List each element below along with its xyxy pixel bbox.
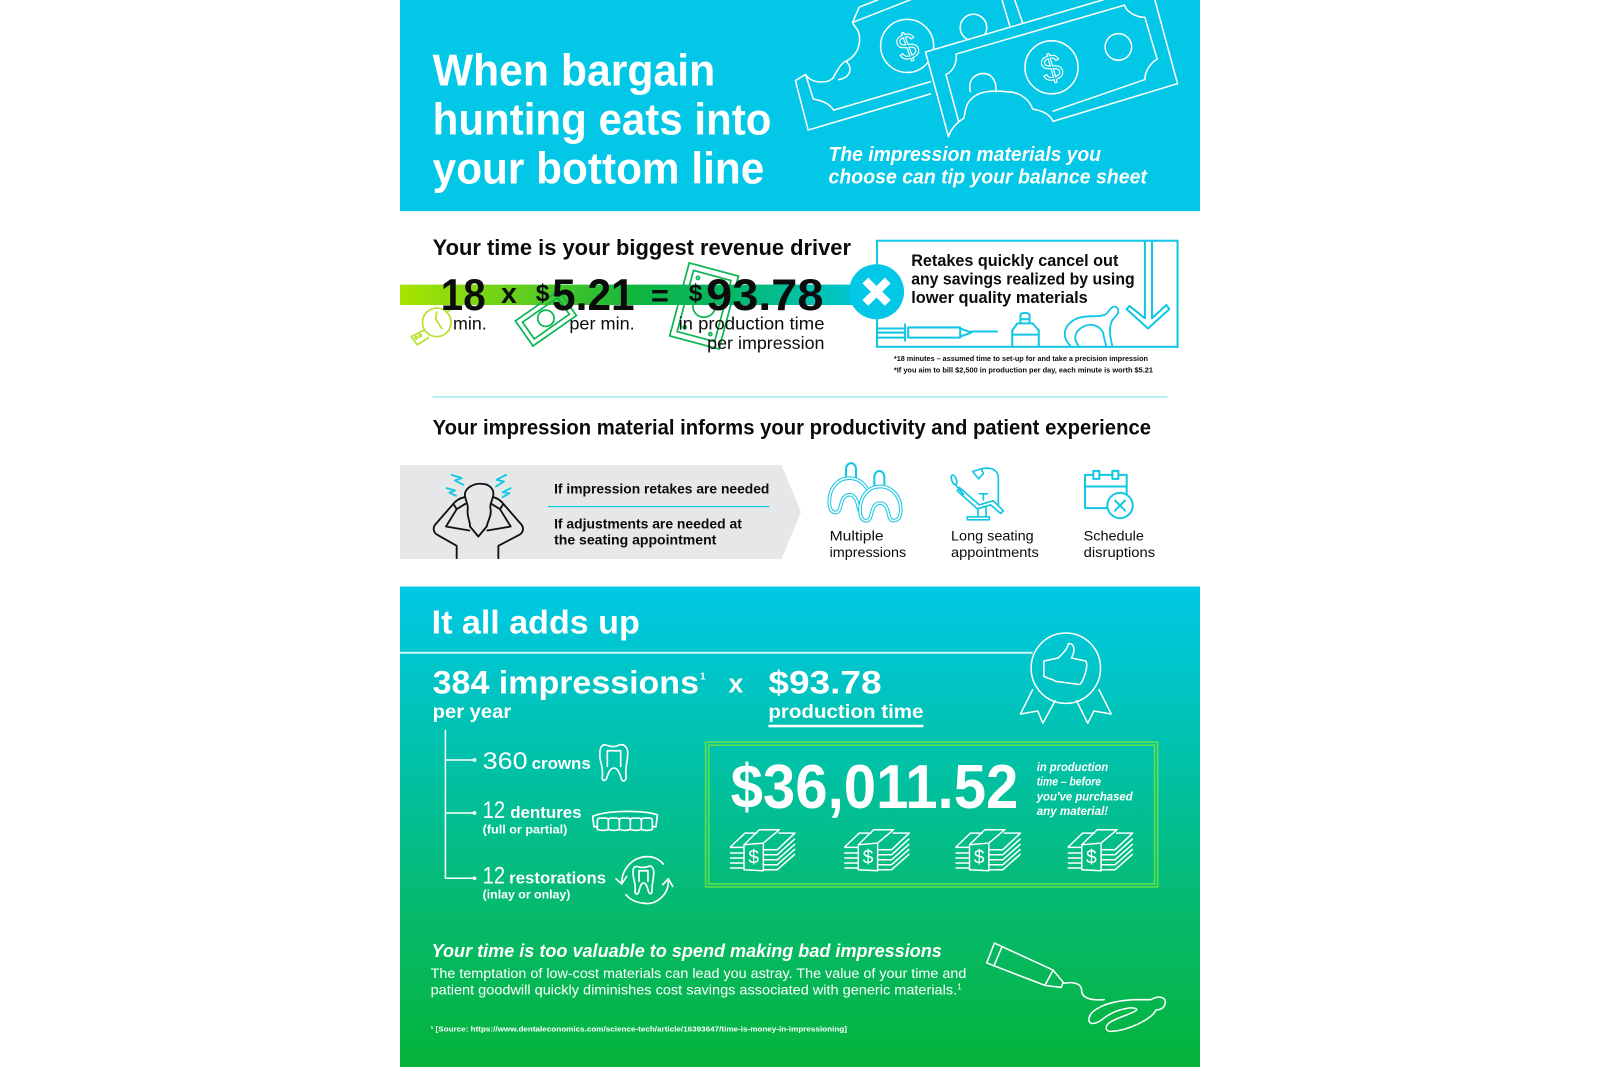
item: restorations: 12 — [483, 862, 505, 889]
equation: 18 — [441, 269, 486, 320]
equation: $ — [536, 280, 550, 307]
icon: syringe — [878, 324, 997, 341]
label: appointments — [951, 545, 1039, 561]
closing text: 1 — [957, 982, 962, 991]
item: crowns: crowns — [532, 755, 591, 773]
title — [433, 45, 771, 194]
arrow text: If impression retakes are needed — [554, 482, 769, 497]
icon: bitten dollar bills: $ — [891, 24, 924, 69]
icon: bitten dollar bills: $ — [1036, 45, 1067, 90]
icon: tube and tray — [987, 943, 1165, 1031]
equation labels: per impression — [707, 333, 824, 353]
total note — [1036, 760, 1133, 818]
multiply sign: x — [729, 669, 744, 699]
item: schedule disruptions — [1084, 471, 1155, 561]
total note: any material! — [1037, 804, 1108, 818]
panel: it all adds up — [400, 587, 1200, 1067]
equation: 93.78 — [706, 269, 823, 320]
label — [951, 529, 1039, 561]
callout text: lower quality materials — [911, 288, 1088, 307]
equation: $ — [689, 280, 703, 307]
stat: production time — [768, 664, 924, 727]
equation labels: per min. — [569, 313, 635, 333]
icon: down arrow — [1127, 241, 1169, 328]
footnotes: *18 minutes – assumed time to set-up for and take a precision impression — [894, 354, 1148, 363]
icon: impression tray — [1065, 307, 1118, 346]
footnotes — [894, 354, 1154, 374]
icon: thumbs-up badge — [1020, 633, 1111, 723]
equation labels: min. — [453, 313, 487, 333]
icon: cash stack 4 — [1068, 830, 1133, 871]
label: impressions — [830, 545, 906, 561]
total note: you've purchased — [1036, 790, 1133, 804]
item: dentures: 12 — [483, 797, 505, 824]
icon: money bill tilted — [670, 263, 738, 349]
subtitle: choose can tip your balance sheet — [829, 167, 1148, 189]
total note: time – before — [1037, 774, 1101, 788]
tree connector — [445, 730, 476, 880]
item: dentures — [483, 797, 582, 836]
icon: cash stack 1 — [730, 830, 795, 871]
equation: x — [501, 278, 517, 310]
arrow text — [548, 482, 769, 548]
icon: calendar — [1085, 471, 1133, 518]
icon: cash stack 2 — [844, 830, 909, 871]
label: Schedule — [1084, 529, 1144, 545]
panel: total box — [706, 742, 1158, 887]
closing heading: Your time is too valuable to spend making bad impressions — [432, 940, 942, 961]
icon: restoration tooth with arrows — [616, 857, 673, 904]
stat: production time: production time — [768, 701, 924, 723]
equation labels: in production time — [679, 313, 824, 333]
icon: cash stack 3: $ — [974, 847, 985, 868]
title: When bargain — [433, 45, 715, 96]
icon: X circle — [849, 264, 904, 319]
icon: cash stack 3 — [956, 830, 1021, 871]
icon: watch — [411, 305, 458, 345]
label: Multiple — [830, 529, 884, 545]
stat: 384 impressions — [433, 664, 706, 723]
arrow text: the seating appointment — [554, 533, 717, 548]
panel: gray arrow — [400, 465, 801, 559]
icon: bottle — [1012, 313, 1039, 346]
icon: cash stack 4: $ — [1086, 847, 1097, 868]
icon: stressed person — [434, 475, 523, 558]
icon: dental chair — [950, 468, 1003, 520]
icon: crown tooth — [600, 745, 628, 781]
item: long seating — [950, 468, 1039, 561]
item: crowns — [483, 748, 591, 775]
callout text — [911, 251, 1135, 307]
source note: ¹ [Source: https://www.dentaleconomics.com/science-tech/article/16393647/time-is-money-in-impressioning] — [431, 1024, 847, 1033]
subtitle — [829, 144, 1148, 189]
label — [830, 529, 906, 561]
item: crowns: 360 — [483, 748, 528, 775]
chart: gradient equation bar — [400, 285, 859, 305]
title: your bottom line — [433, 143, 764, 194]
panel: header — [400, 0, 1200, 211]
callout text: Retakes quickly cancel out — [911, 251, 1119, 270]
item: restorations: (inlay or onlay) — [483, 888, 570, 902]
closing text — [431, 966, 966, 999]
icon: bitten dollar bills — [795, 0, 1178, 137]
heading: revenue driver: Your time is your biggest revenue driver — [433, 235, 851, 260]
icon: cash stack 2: $ — [863, 847, 874, 868]
stat: 384 impressions: per year — [433, 701, 512, 723]
stat: 384 impressions: 384 impressions — [433, 664, 699, 701]
callout text: any savings realized by using — [911, 270, 1135, 289]
item: dentures: (full or partial) — [483, 822, 567, 836]
total note: in production — [1037, 760, 1108, 774]
icon: trays — [829, 463, 901, 521]
icon: denture — [593, 811, 657, 830]
heading: It all adds up — [432, 604, 640, 641]
heading: productivity: Your impression material informs your productivity and patient experience — [433, 417, 1151, 440]
icon: cash stack 1: $ — [748, 847, 759, 868]
closing text: patient goodwill quickly diminishes cost savings associated with generic materials. — [431, 983, 957, 999]
equation: 5.21 — [552, 269, 635, 320]
item: restorations — [483, 862, 606, 902]
title: hunting eats into — [433, 94, 771, 145]
icon: money bill small — [515, 291, 576, 346]
item: restorations: restorations — [509, 869, 606, 887]
equation labels — [453, 313, 824, 353]
stat: production time: $93.78 — [768, 664, 882, 701]
footnotes: *If you aim to bill $2,500 in production per day, each minute is worth $5.21 — [894, 365, 1154, 374]
label: disruptions — [1084, 545, 1155, 561]
item: multiple impressions — [829, 463, 906, 561]
label: Long seating — [951, 529, 1034, 545]
panel: retakes callout — [877, 241, 1178, 347]
closing text: The temptation of low-cost materials can lead you astray. The value of your time and — [431, 966, 966, 982]
arrow text: If adjustments are needed at — [554, 516, 742, 531]
label — [1084, 529, 1155, 561]
item: dentures: dentures — [510, 804, 582, 822]
total amount: $36,011.52 — [731, 753, 1018, 822]
equation: = — [651, 279, 669, 313]
equation — [441, 269, 823, 320]
stat: 384 impressions: 1 — [700, 671, 706, 682]
subtitle: The impression materials you — [829, 144, 1101, 166]
